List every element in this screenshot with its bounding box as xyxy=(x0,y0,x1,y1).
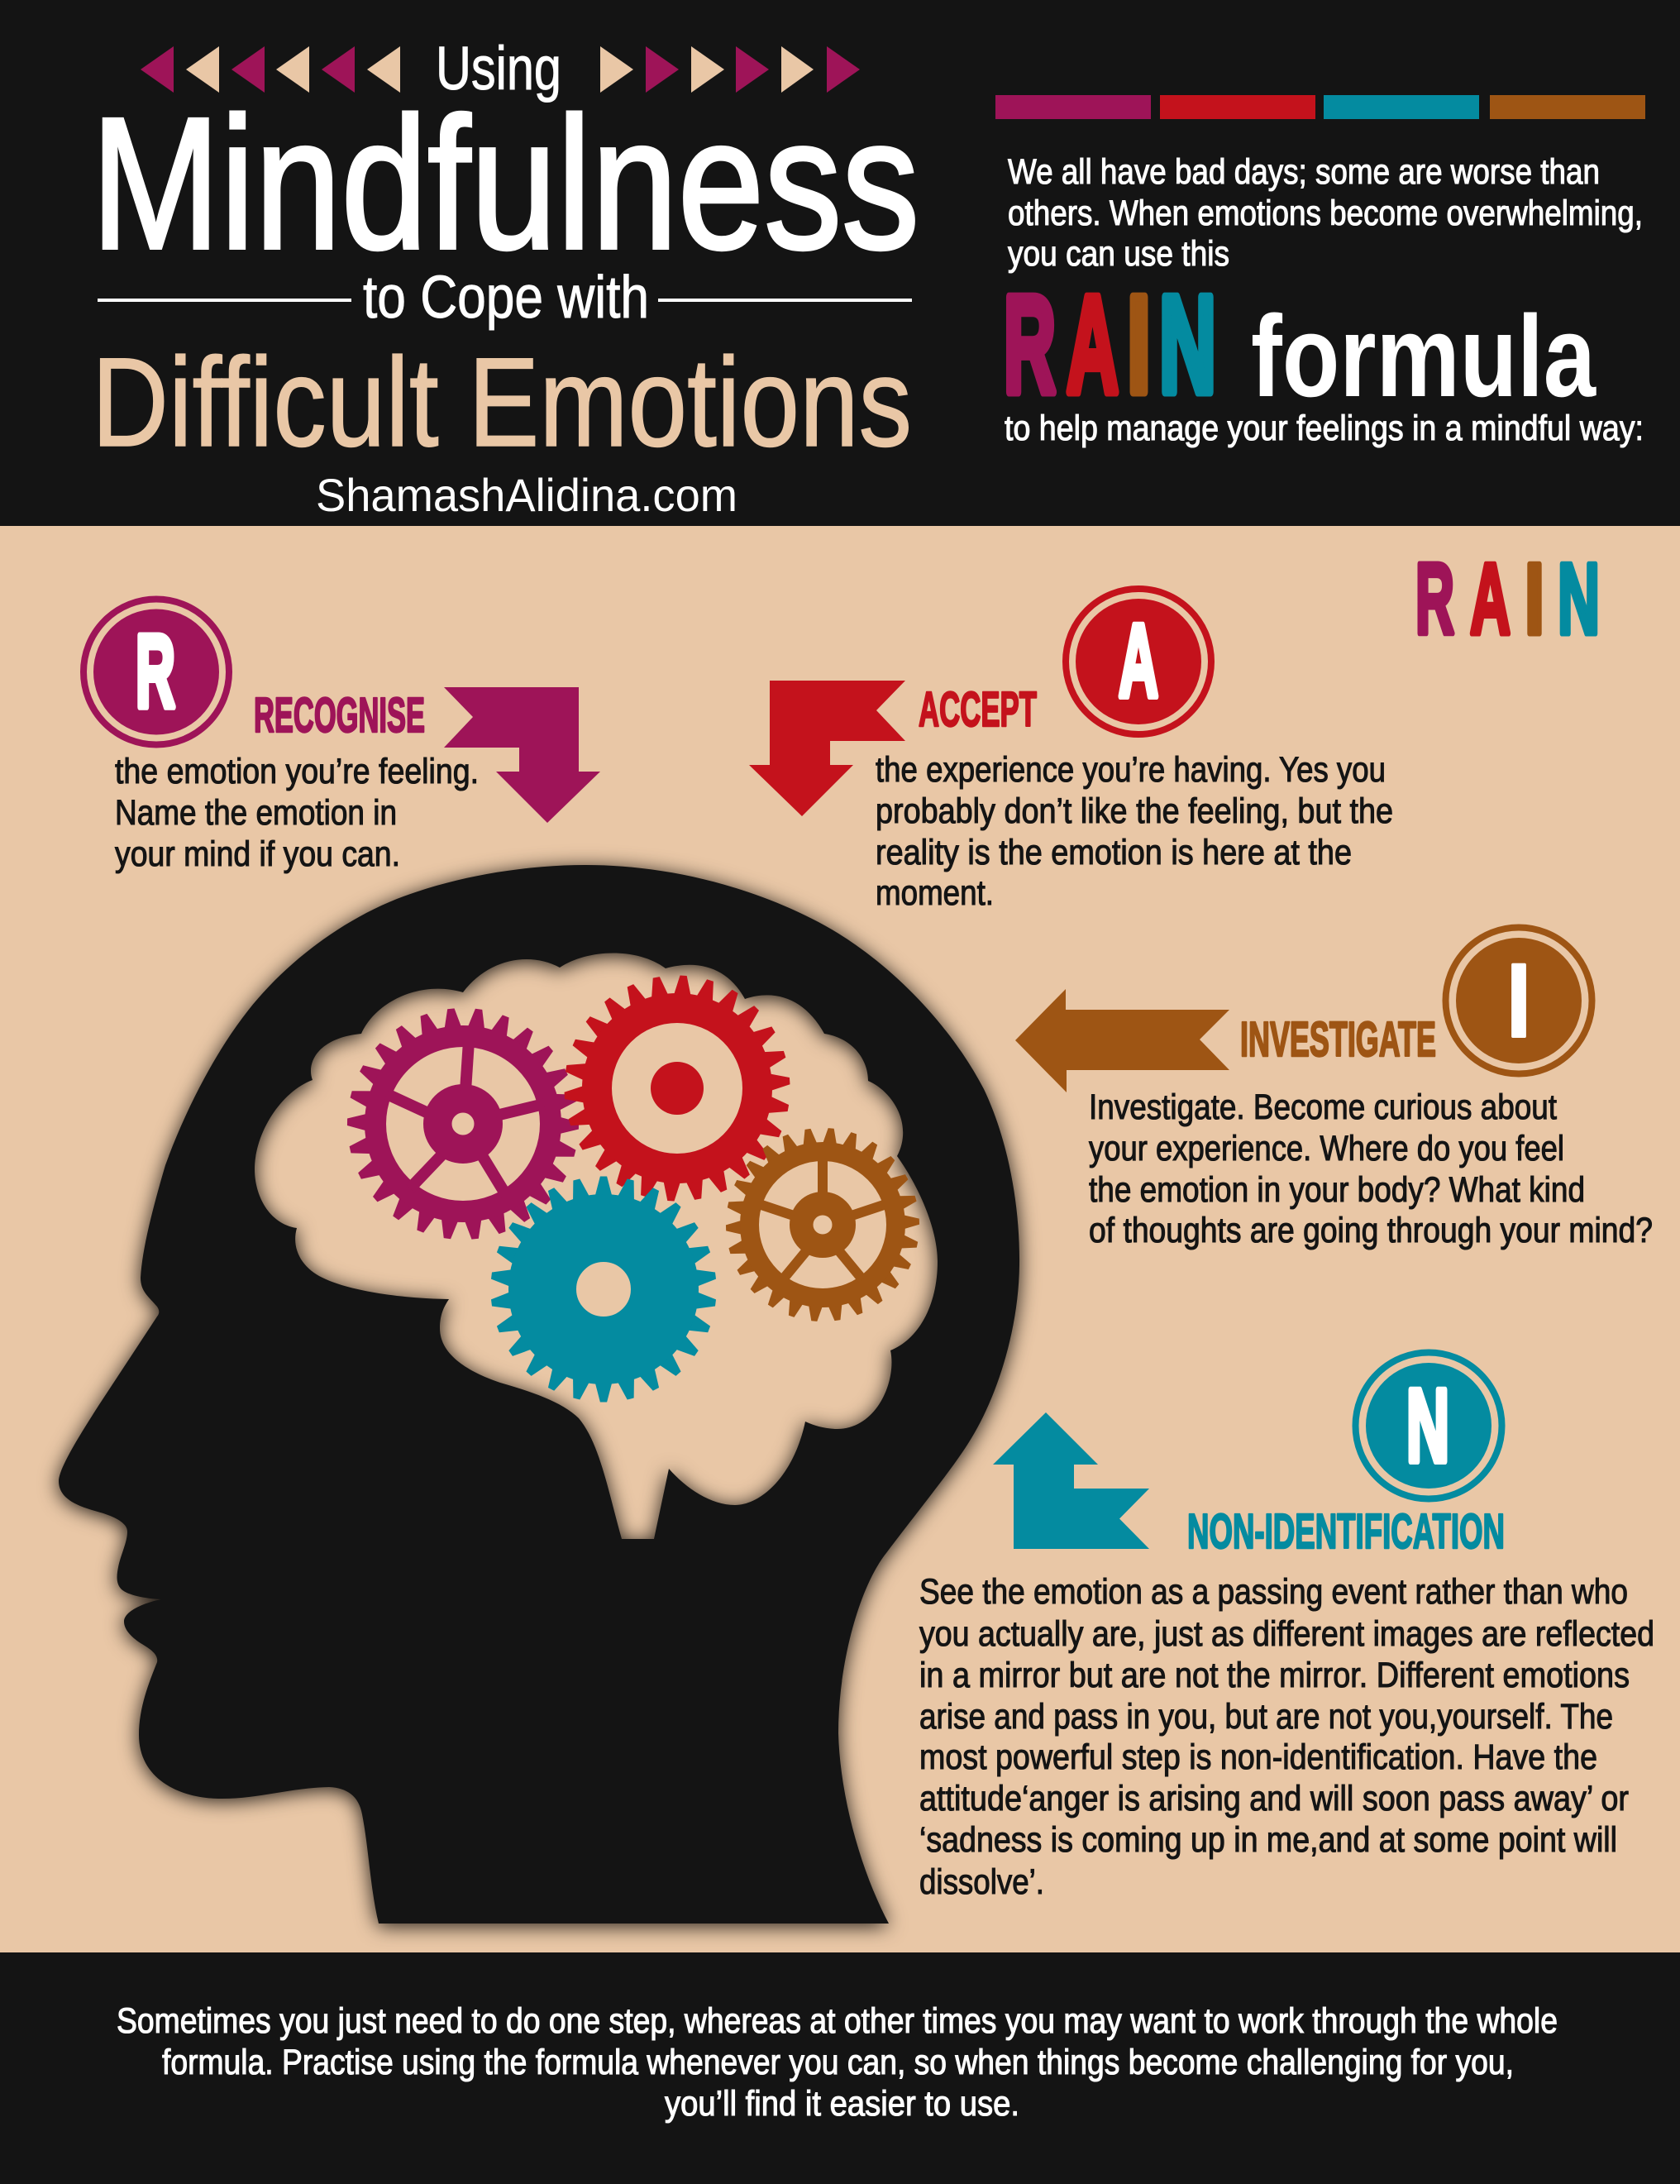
small RAIN logo: I xyxy=(1525,542,1544,655)
text R: the emotion you’re feeling. xyxy=(115,752,479,791)
arrow I xyxy=(1015,989,1229,1092)
badge N xyxy=(1356,1353,1501,1498)
small RAIN logo xyxy=(1415,542,1600,655)
RAIN large heading: N xyxy=(1159,268,1216,422)
website: ShamashAlidina.com xyxy=(316,469,737,521)
badge I: I xyxy=(1507,944,1530,1059)
arrow N xyxy=(993,1412,1149,1549)
RAIN large heading xyxy=(1004,268,1216,422)
text I: your experience. Where do you feel xyxy=(1089,1129,1564,1168)
RAIN large heading: I xyxy=(1127,268,1151,422)
intro paragraph xyxy=(1008,152,1643,274)
text A: reality is the emotion is here at the xyxy=(876,833,1352,872)
RAIN large heading: A xyxy=(1067,268,1119,422)
intro paragraph: We all have bad days; some are worse than xyxy=(1008,152,1600,192)
heading ACCEPT: ACCEPT xyxy=(919,682,1037,737)
gear: red xyxy=(558,969,796,1207)
arrow R xyxy=(444,687,600,823)
text N xyxy=(919,1572,1654,1902)
small RAIN logo: R xyxy=(1415,542,1454,655)
formula word: formula xyxy=(1251,291,1596,421)
small RAIN logo: N xyxy=(1558,542,1600,655)
title: Mindfulness: Mindfulness xyxy=(91,79,919,289)
gear: magenta xyxy=(336,996,590,1251)
heading RECOGNISE: RECOGNISE xyxy=(254,688,425,743)
left decorative triangles xyxy=(141,46,400,93)
text I xyxy=(1089,1087,1653,1250)
right decorative triangles xyxy=(600,46,860,93)
title rule right xyxy=(658,299,912,302)
heading INVESTIGATE: INVESTIGATE xyxy=(1240,1012,1436,1067)
title rule left xyxy=(98,299,351,302)
badge A xyxy=(1066,589,1211,734)
text R: your mind if you can. xyxy=(115,834,400,874)
text N: dissolve’. xyxy=(919,1862,1044,1902)
main tan panel xyxy=(0,526,1680,1952)
gear: teal xyxy=(490,1176,717,1403)
text I: Investigate. Become curious about xyxy=(1089,1087,1557,1127)
footer panel xyxy=(0,1952,1680,2184)
RAIN large heading: R xyxy=(1004,268,1056,422)
text N: most powerful step is non-identification. Have the xyxy=(919,1737,1597,1777)
title: to Cope with: to Cope with xyxy=(363,265,649,331)
step N: non-identification xyxy=(919,1353,1654,1902)
footer text: formula. Practise using the formula whenever you can, so when things become challenging for you, xyxy=(162,2043,1514,2082)
step I: investigate xyxy=(1015,928,1653,1250)
step A: accept xyxy=(749,589,1393,913)
title: Using: Using xyxy=(436,34,561,103)
gear: brown xyxy=(718,1120,928,1330)
text A: the experience you’re having. Yes you xyxy=(876,750,1386,790)
head silhouette with brain cut-out xyxy=(59,865,1019,1924)
badge R xyxy=(84,599,229,744)
text A: moment. xyxy=(876,873,994,913)
badge N: N xyxy=(1406,1369,1449,1484)
text R xyxy=(115,752,479,874)
colour bars xyxy=(995,95,1645,119)
footer text: you’ll find it easier to use. xyxy=(665,2084,1019,2124)
badge A: A xyxy=(1119,604,1158,719)
arrow A xyxy=(749,681,905,816)
text R: Name the emotion in xyxy=(115,793,397,833)
small RAIN logo: A xyxy=(1470,542,1511,655)
badge I xyxy=(1445,928,1592,1073)
text A xyxy=(876,750,1393,913)
text A: probably don’t like the feeling, but the xyxy=(876,791,1393,831)
text I: the emotion in your body? What kind xyxy=(1089,1170,1585,1210)
header panel xyxy=(0,0,1680,526)
footer text xyxy=(117,2001,1558,2124)
intro paragraph: you can use this xyxy=(1008,234,1229,274)
step R: recognise xyxy=(84,599,600,874)
title: Difficult Emotions: Difficult Emotions xyxy=(92,332,912,473)
badge R: R xyxy=(136,614,175,729)
